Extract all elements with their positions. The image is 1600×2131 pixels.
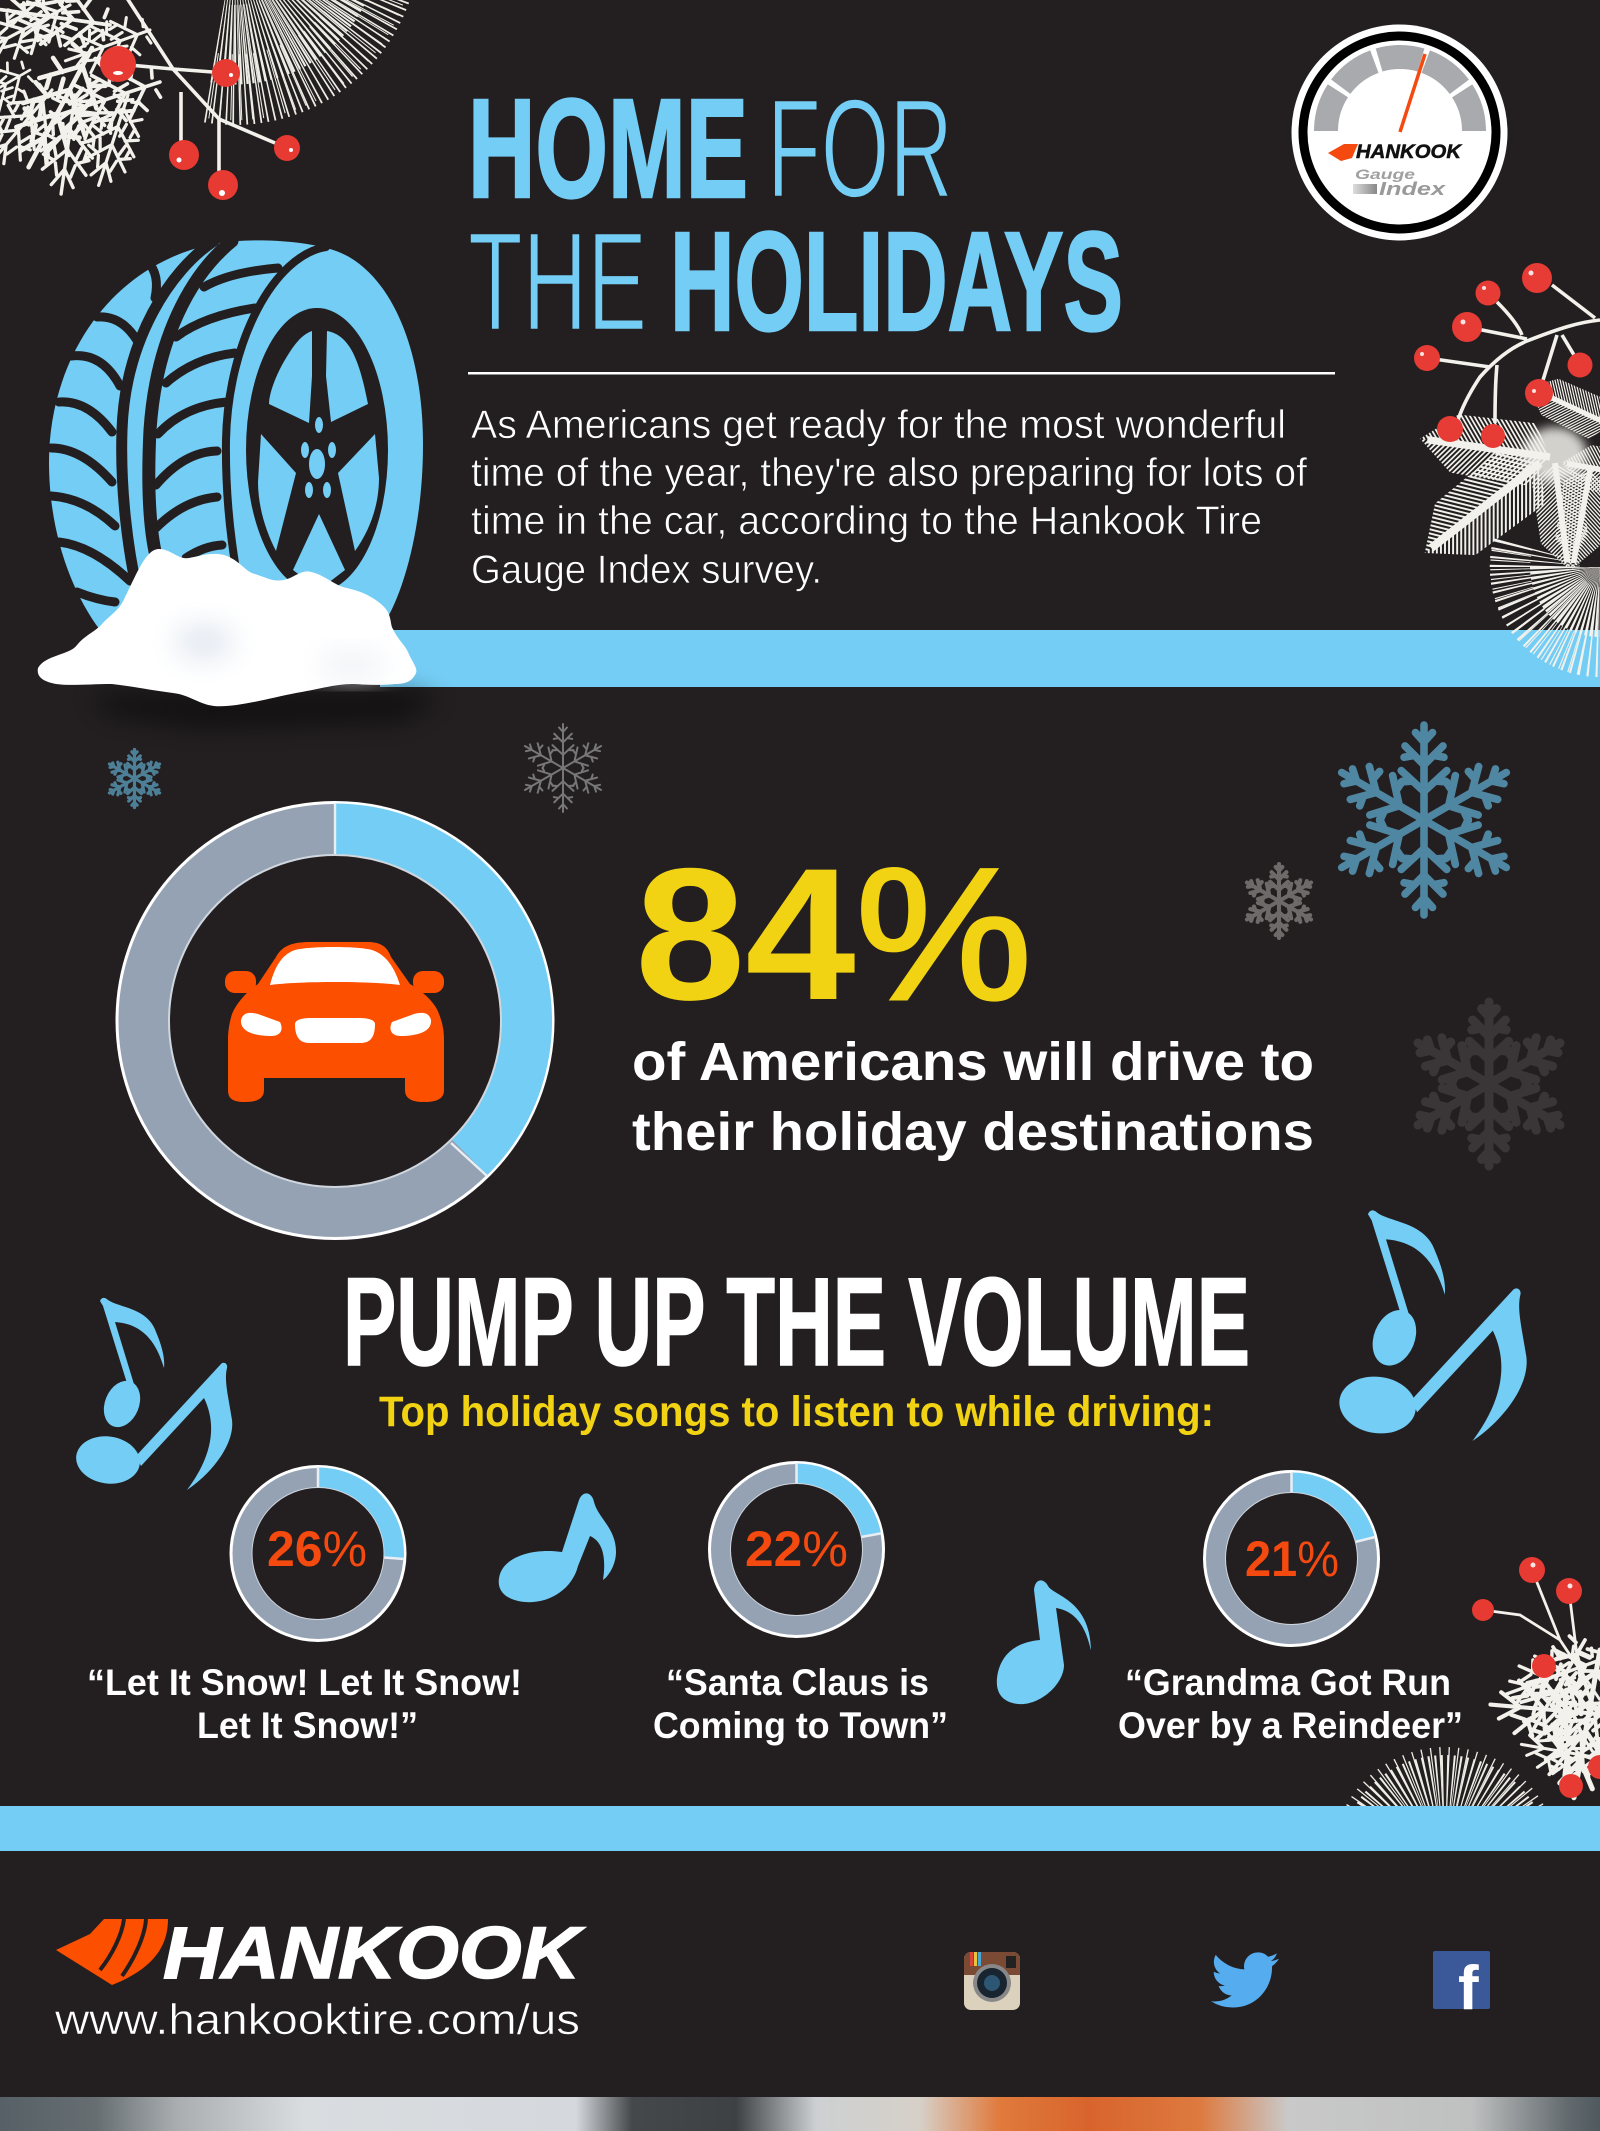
intro text: time in the car, according to the Hankook Tire <box>471 499 1262 543</box>
intro text <box>471 403 1308 592</box>
title: FOR <box>767 69 953 227</box>
tread grooves <box>51 241 326 630</box>
Hankook Gauge Index badge <box>1292 24 1508 240</box>
icon: snow pile <box>38 549 440 728</box>
84% statistic: 84% <box>635 829 1032 1039</box>
song label 1 <box>87 1662 522 1746</box>
song label 1: Let It Snow!” <box>197 1705 418 1746</box>
intro text: As Americans get ready for the most wonderful <box>471 403 1286 447</box>
donut: 21 percent: 21% <box>1245 1531 1339 1587</box>
song label 2 <box>653 1662 948 1746</box>
song label 3 <box>1118 1662 1463 1746</box>
donut: 26 percent: 26% <box>267 1521 367 1577</box>
song label 3: Over by a Reindeer” <box>1118 1705 1463 1746</box>
icon: instagram <box>964 1952 1020 2010</box>
song label 2: Coming to Town” <box>653 1705 948 1746</box>
donut: 21 percent <box>1204 1472 1378 1646</box>
statistic caption: of Americans will drive to <box>632 1032 1314 1092</box>
bottom gradient strip <box>0 2097 1600 2131</box>
Hankook footer logo: HANKOOK <box>163 1913 586 1994</box>
top-right berry and pine branch <box>1359 263 1600 657</box>
icon: twitter <box>1211 1952 1279 2008</box>
song label 3: “Grandma Got Run <box>1125 1662 1451 1703</box>
icon: single music note lower <box>997 1580 1091 1704</box>
tire tread and sidewall <box>49 240 423 630</box>
icon: double music notes right <box>1336 1210 1527 1441</box>
song label 2: “Santa Claus is <box>666 1662 929 1703</box>
icon: double music notes left <box>73 1298 232 1490</box>
title <box>468 69 1123 360</box>
subheading: Top holiday songs to listen to while driving: <box>379 1388 1214 1436</box>
wheel rim <box>246 308 388 592</box>
statistic caption <box>632 1032 1314 1162</box>
title: HOLIDAYS <box>670 202 1123 360</box>
donut: 22 percent: 22% <box>745 1521 848 1577</box>
title: HOME <box>468 69 748 227</box>
intro text: Gauge Index survey. <box>471 548 822 592</box>
donut: 26 percent <box>231 1466 405 1640</box>
statistic caption: their holiday destinations <box>632 1102 1314 1162</box>
Hankook Gauge Index badge: HANKOOK <box>1356 142 1462 163</box>
bottom-right berry branch <box>1346 1557 1600 1806</box>
icon: facebook: f <box>1458 1954 1479 2023</box>
title rule <box>468 372 1335 374</box>
icon: orange car <box>225 942 444 1102</box>
icon: facebook <box>1433 1951 1490 2023</box>
icon: single music note middle <box>499 1493 616 1602</box>
intro text: time of the year, they're also preparing for lots of <box>471 451 1308 495</box>
Hankook Gauge Index badge: Index <box>1379 179 1446 199</box>
song label 1: “Let It Snow! Let It Snow! <box>87 1662 522 1703</box>
snowflakes <box>106 724 1570 1166</box>
top-left berry branch <box>0 0 382 200</box>
icon: blue winter tire <box>49 240 423 630</box>
Hankook Gauge Index badge: Gauge <box>1355 166 1415 182</box>
title: THE <box>468 202 647 360</box>
donut chart: 84% <box>117 802 553 1238</box>
lower blue band <box>0 1806 1600 1851</box>
website url: www.hankooktire.com/us <box>54 1996 580 2044</box>
top blue band <box>380 630 1600 687</box>
donut: 22 percent <box>710 1462 884 1636</box>
